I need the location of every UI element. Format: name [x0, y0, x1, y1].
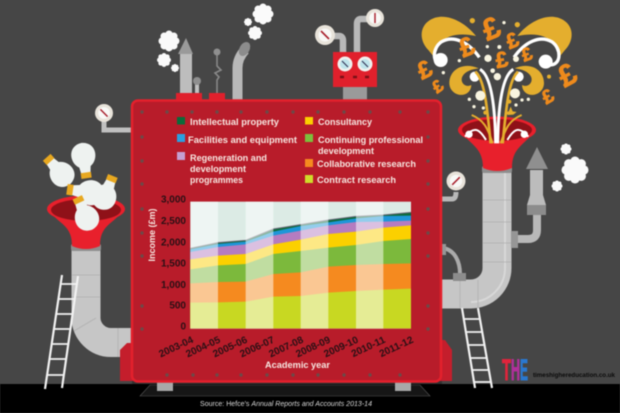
pound signs: £	[454, 30, 479, 63]
right pipe	[438, 166, 512, 308]
right gauges and small pipe	[442, 172, 466, 281]
y axis labels: 2,000	[161, 238, 186, 248]
y axis labels: 3,000	[161, 194, 186, 206]
logo: H	[511, 354, 520, 387]
pound signs: £	[478, 11, 506, 48]
legend: contract research: Contract research	[317, 175, 396, 185]
logo: T	[502, 354, 511, 387]
panel: machine body	[132, 100, 441, 382]
fountain	[422, 17, 572, 143]
y axis labels	[161, 194, 186, 332]
legend: continuing professional development	[305, 134, 423, 156]
x axis title: Academic year	[265, 360, 330, 371]
right clouds	[552, 144, 588, 192]
x axis labels: 2005-06	[211, 335, 250, 360]
sparkle dots	[442, 21, 530, 110]
machine feet	[120, 340, 452, 381]
x axis labels: 2003-04	[157, 335, 196, 360]
floor	[0, 384, 620, 413]
legend: regeneration	[177, 152, 267, 185]
y axis labels: 0	[180, 322, 186, 332]
pound signs: £	[493, 46, 511, 73]
top: exhaust pipe	[236, 40, 253, 100]
legend: continuing professional development: Continuing professional	[318, 135, 423, 145]
left funnel	[47, 196, 125, 249]
legend: regeneration: development	[190, 164, 246, 174]
x axis labels: 2009-10	[322, 335, 361, 360]
source: Source: Hefce's Annual Reports and Accounts 2013-14	[200, 399, 372, 408]
pound signs	[413, 11, 583, 109]
area chart	[190, 202, 411, 329]
legend: intellectual property: Intellectual property	[190, 117, 279, 127]
legend	[177, 117, 423, 185]
legend: facilities and equipment: Facilities and equipment	[188, 135, 297, 145]
pound signs: £	[519, 43, 535, 65]
y axis labels: 2,500	[161, 216, 186, 227]
x axis labels: 2004-05	[184, 335, 223, 360]
top: arrow chimney and stems	[176, 38, 225, 101]
left ladder	[45, 275, 78, 389]
icon: light bulbs	[38, 141, 124, 235]
x axis labels: 2007-08	[267, 335, 306, 360]
legend: consultancy: Consultancy	[318, 117, 372, 127]
pound signs: £	[538, 85, 558, 109]
x axis labels: 2010-11	[350, 335, 388, 360]
legend: regeneration: programmes	[190, 175, 243, 185]
x axis labels: 2008-09	[294, 335, 333, 360]
y axis title: Income (£m)	[147, 208, 157, 262]
left pipe	[71, 244, 134, 357]
logo: E	[520, 354, 528, 387]
right ladder	[462, 308, 492, 388]
pound signs: £	[429, 76, 448, 97]
pound signs: £	[552, 57, 583, 94]
logo: timeshighereducation.co.uk	[533, 372, 615, 379]
top clouds	[157, 4, 274, 72]
right half of fountain	[498, 17, 572, 143]
legend: regeneration: Regeneration and	[190, 153, 267, 163]
x axis labels: 2006-07	[238, 335, 277, 360]
x axis labels: 2011-12	[378, 335, 416, 360]
pound signs: £	[503, 28, 523, 54]
pound signs: £	[413, 55, 437, 85]
x axis labels	[157, 335, 416, 360]
bolts	[140, 110, 430, 377]
y axis labels: 1,500	[161, 258, 186, 270]
control box with gauges	[315, 5, 388, 101]
y axis labels: 1,000	[161, 280, 186, 291]
right side chimney	[511, 147, 548, 248]
right funnel	[458, 116, 536, 171]
left half of fountain	[422, 17, 496, 143]
platform	[132, 380, 442, 396]
legend: collaborative research: Collaborative research	[317, 159, 416, 169]
logo	[502, 354, 615, 387]
gold dots	[470, 18, 551, 115]
left machine gauge	[95, 104, 132, 130]
legend: continuing professional development: development	[318, 146, 374, 156]
y axis labels: 500	[169, 300, 186, 312]
